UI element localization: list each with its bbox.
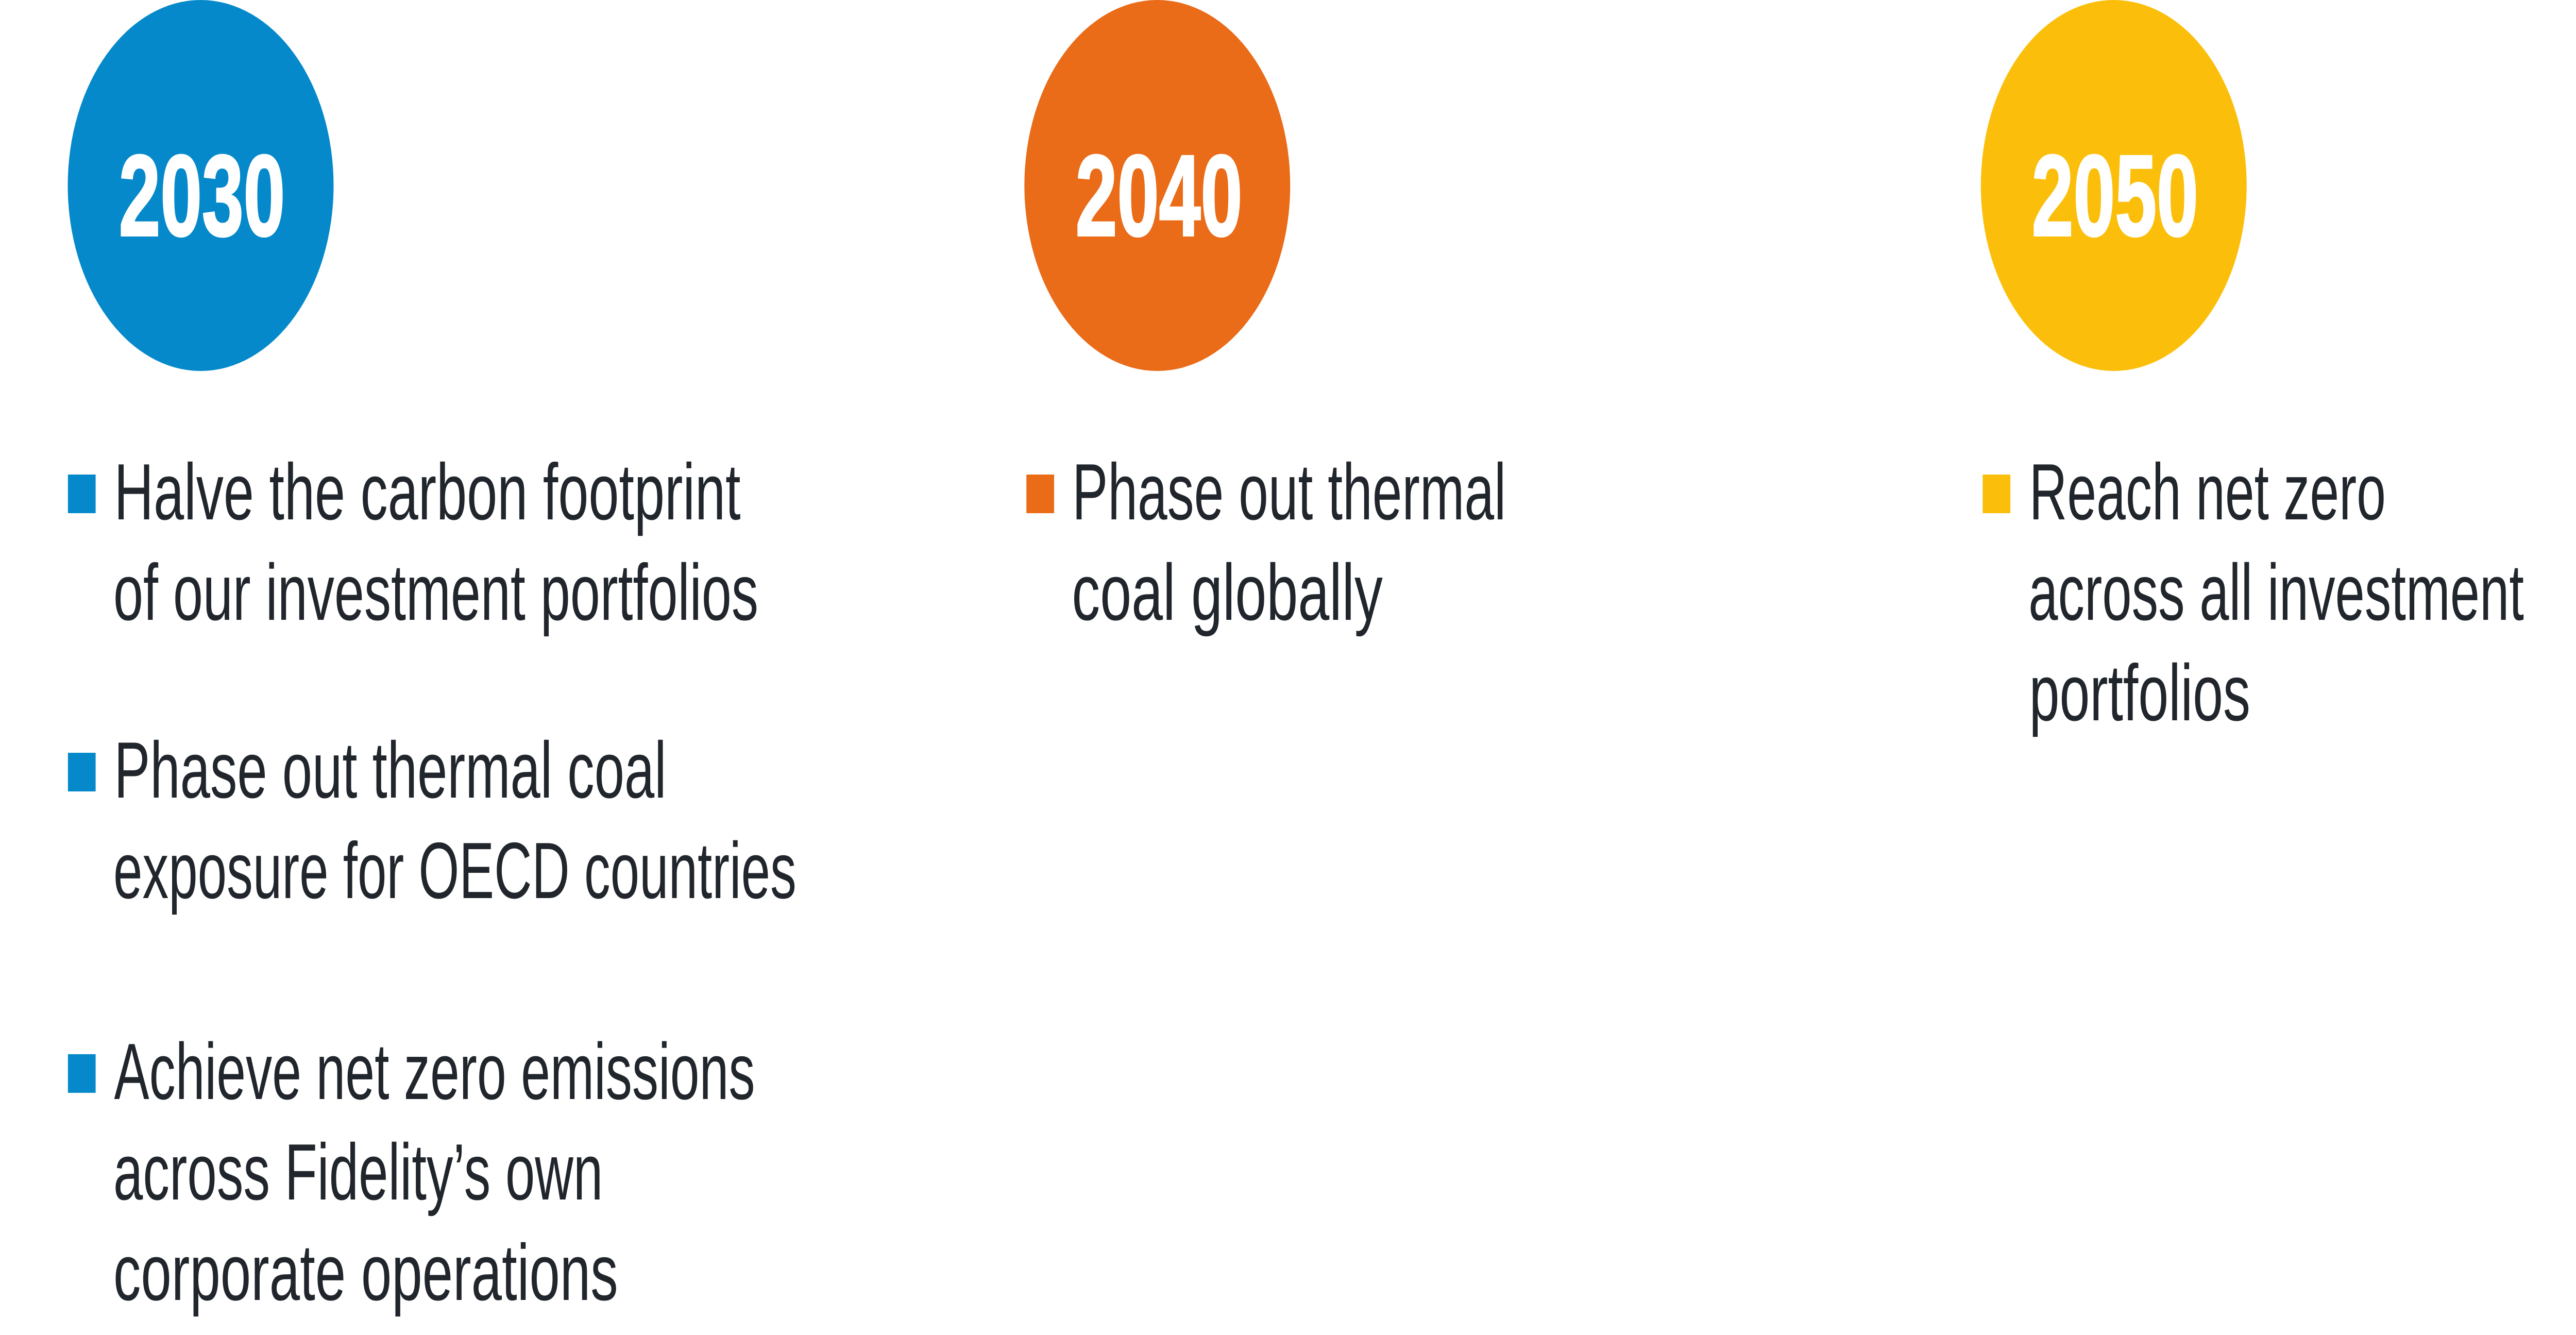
badge: 2050 circle bbox=[1981, 0, 2247, 371]
list item: phase out thermal coal exposure: Phase out thermal coal bbox=[114, 725, 667, 815]
list item: reach net zero across all investment portfolios: Reach net zero bbox=[2029, 447, 2386, 536]
badge: 2050 circle: 2050 bbox=[2032, 132, 2198, 260]
badge: 2030 circle bbox=[68, 0, 333, 371]
list item: achieve net zero emissions: corporate operations bbox=[113, 1228, 618, 1317]
list item: phase out thermal coal exposure bbox=[68, 725, 796, 915]
list item: halve the carbon footprint: of our investment portfolios bbox=[113, 548, 758, 637]
list item: achieve net zero emissions: across Fidelity’s own bbox=[113, 1127, 603, 1216]
list item: achieve net zero emissions: Achieve net zero emissions bbox=[114, 1027, 755, 1116]
list item: reach net zero across all investment portfolios: portfolios bbox=[2029, 648, 2250, 737]
list item: phase out thermal coal globally bbox=[1026, 447, 1506, 637]
list item: phase out thermal coal globally: coal globally bbox=[1072, 548, 1383, 637]
panel: 2040 milestones bbox=[1024, 0, 1506, 637]
badge: 2040 circle: 2040 bbox=[1076, 132, 1242, 260]
list item: reach net zero across all investment portfolios: across all investment bbox=[2028, 548, 2524, 637]
list item: achieve net zero emissions bbox=[68, 1027, 755, 1317]
list item: halve the carbon footprint bbox=[68, 447, 758, 637]
panel: 2030 milestones bbox=[68, 0, 796, 1317]
list item: reach net zero across all investment portfolios bbox=[1982, 447, 2524, 737]
list item: phase out thermal coal exposure: exposure for OECD countries bbox=[113, 826, 796, 915]
panel: 2050 milestones bbox=[1981, 0, 2524, 737]
list item: halve the carbon footprint: Halve the carbon footprint bbox=[114, 447, 741, 536]
badge: 2030 circle: 2030 bbox=[119, 132, 285, 260]
badge: 2040 circle bbox=[1024, 0, 1290, 371]
list item: phase out thermal coal globally: Phase out thermal bbox=[1072, 447, 1506, 536]
